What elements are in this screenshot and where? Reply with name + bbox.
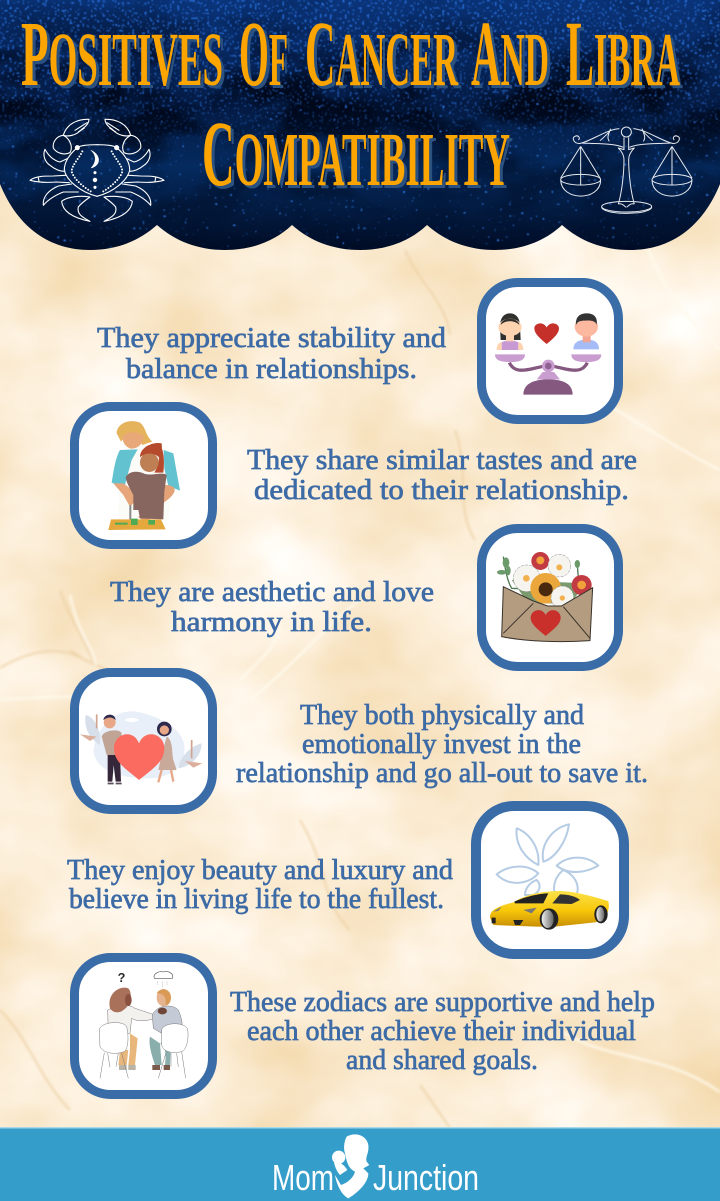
icon: mother and child silhouette — [332, 1134, 369, 1198]
icon: friends sitting and comforting — [99, 971, 188, 1078]
text: beauty and luxury: believe in living life to the fullest. — [69, 884, 444, 915]
card frame — [482, 528, 618, 666]
header banner: starry sky with scalloped edge — [0, 0, 720, 252]
text: invest in relationship: relationship and go all-out to save it. — [236, 758, 648, 789]
text: supportive: and shared goals. — [346, 1045, 538, 1076]
title: AND — [471, 3, 549, 106]
text: aesthetic and harmony — [110, 577, 434, 638]
text: invest in relationship: emotionally invest in the — [302, 729, 581, 760]
text: stability and balance: They appreciate stability and — [97, 323, 446, 354]
card frame — [482, 282, 618, 420]
panel: invest in relationship — [74, 672, 648, 810]
card frame — [74, 672, 212, 810]
card frame — [74, 406, 212, 544]
title: CANCER — [308, 6, 462, 109]
text: aesthetic and harmony: harmony in life. — [171, 607, 372, 638]
title: OF — [242, 6, 291, 109]
title: POSITIVES — [24, 6, 226, 109]
title: AND — [474, 6, 552, 109]
panel: shared tastes — [74, 406, 637, 544]
icon: libra scales — [561, 127, 692, 213]
title — [21, 3, 683, 209]
text: supportive: each other achieve their individual — [247, 1016, 636, 1047]
card frame — [74, 958, 212, 1094]
logo wordmark: Junction — [373, 1157, 479, 1198]
text: stability and balance — [97, 323, 446, 385]
card frame — [476, 806, 624, 954]
text: aesthetic and harmony: They are aesthetic and love — [110, 577, 434, 608]
icon: envelope with flowers and heart — [497, 552, 593, 642]
footer bar — [0, 1127, 720, 1201]
title: OF — [239, 3, 288, 106]
icon: friends sitting and comforting: ? — [118, 971, 125, 985]
panel: aesthetic and harmony — [110, 528, 618, 666]
icon: couple on balance scale — [495, 313, 601, 395]
icon: couple cooking together — [108, 421, 180, 530]
title: CANCER — [305, 3, 459, 106]
text: stability and balance: balance in relationships. — [126, 354, 417, 385]
panel: supportive — [74, 958, 655, 1094]
icon: luxury car and flower — [490, 824, 609, 930]
icon: couple holding a big heart — [80, 711, 202, 784]
text: shared tastes: dedicated to their relationship. — [254, 475, 629, 506]
icon: cancer crab — [30, 119, 164, 221]
text: shared tastes — [247, 445, 637, 506]
logo wordmark: Mom — [272, 1157, 334, 1198]
text: beauty and luxury: They enjoy beauty and luxury and — [67, 855, 453, 886]
panel: beauty and luxury — [67, 806, 624, 954]
title: POSITIVES — [21, 3, 223, 106]
text: beauty and luxury — [67, 855, 453, 915]
text: shared tastes: They share similar tastes and are — [247, 445, 637, 476]
text: invest in relationship — [236, 700, 648, 789]
text: supportive: These zodiacs are supportive and help — [230, 987, 655, 1018]
panel: stability and balance — [97, 282, 618, 420]
logo wordmark — [272, 1157, 479, 1198]
text: supportive — [230, 987, 655, 1076]
text: invest in relationship: They both physically and — [300, 700, 584, 731]
